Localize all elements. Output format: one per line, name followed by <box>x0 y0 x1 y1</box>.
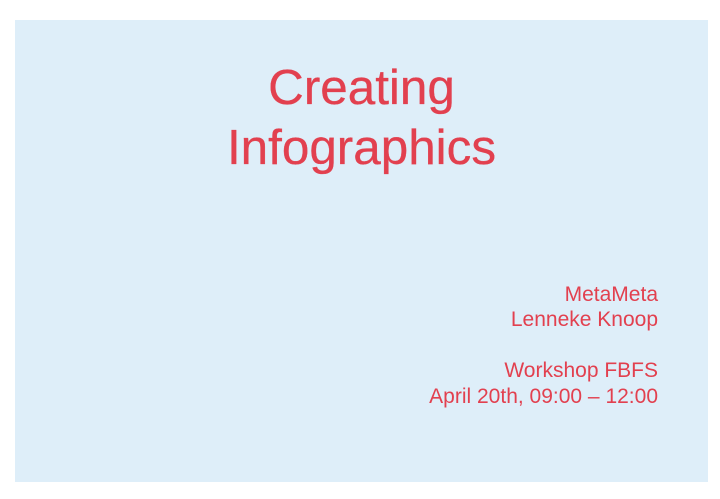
text block: organisation and presenter <box>511 283 658 331</box>
text block: workshop and date: April 20th, 09:00 – 12:00 <box>429 385 658 408</box>
text block: workshop and date <box>429 359 658 408</box>
title: Infographics <box>227 120 496 175</box>
text block: organisation and presenter: Lenneke Knoop <box>511 308 658 331</box>
text block: organisation and presenter: MetaMeta <box>565 283 658 306</box>
text block: workshop and date: Workshop FBFS <box>504 359 658 382</box>
title: Creating <box>268 60 455 115</box>
title <box>227 60 496 175</box>
